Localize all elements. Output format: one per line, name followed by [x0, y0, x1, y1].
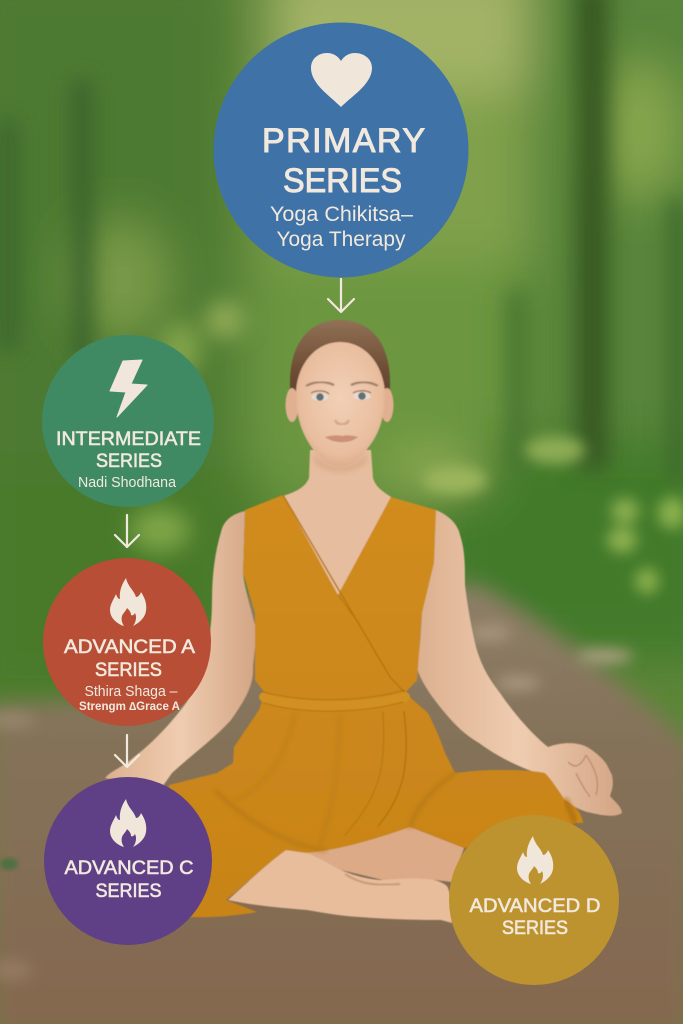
text: intermediate subtitle: Nadi Shodhana	[78, 475, 177, 491]
ears	[286, 388, 394, 422]
icon: flame	[110, 799, 146, 847]
icon: heart	[311, 53, 372, 107]
text: primary series subtitle: Yoga Therapy	[276, 228, 406, 251]
text: primary series subtitle	[270, 203, 413, 251]
arrow: intermediate to advanced A	[115, 515, 139, 547]
icon: flame	[110, 578, 146, 626]
heading: advanced C series: ADVANCED C	[64, 857, 194, 879]
heading: advanced D series: ADVANCED D	[470, 895, 600, 917]
neck and chest	[283, 450, 391, 596]
arrow: advanced A to advanced C	[115, 735, 139, 767]
dress folds, wrap and belt	[215, 495, 575, 850]
heading: advanced C series	[64, 857, 194, 902]
heading: intermediate series: SERIES	[96, 450, 162, 472]
panel: advanced D series	[449, 815, 619, 985]
heading: advanced A series: SERIES	[95, 659, 162, 681]
heading: intermediate series: INTERMEDIATE	[56, 428, 201, 450]
arrow: primary to figure	[328, 279, 354, 312]
face	[296, 342, 385, 466]
figure: seated woman in orange dress	[105, 320, 622, 923]
hand details	[568, 755, 598, 797]
back leg	[300, 827, 464, 882]
panel: advanced A series	[43, 558, 211, 726]
heading: advanced A series	[64, 636, 195, 681]
right arm and hand	[417, 510, 622, 816]
text: advanced A subtitle: Sthira Shaga –	[84, 684, 178, 700]
eyebrows, eyes, nose and lips	[306, 382, 378, 442]
neck shadow	[314, 452, 367, 472]
heading: advanced A series: ADVANCED A	[64, 636, 195, 658]
panel: intermediate series	[42, 335, 214, 507]
heading: primary series: SERIES	[283, 162, 402, 200]
icon: lightning bolt	[110, 360, 147, 417]
heading: primary series	[262, 122, 425, 200]
left arm	[105, 511, 256, 790]
dress	[160, 495, 583, 917]
text: primary series subtitle: Yoga Chikitsa–	[270, 203, 413, 226]
panel: primary series	[214, 22, 468, 278]
heading: advanced D series: SERIES	[502, 917, 568, 939]
front leg and foot	[228, 850, 452, 923]
heading: advanced D series	[470, 895, 600, 939]
heading: intermediate series	[56, 428, 201, 472]
icon: flame	[517, 836, 553, 884]
panel: advanced C series	[44, 777, 212, 945]
hair	[290, 320, 390, 400]
heading: primary series: PRIMARY	[262, 122, 425, 160]
heading: advanced C series: SERIES	[96, 880, 162, 902]
text: advanced A subtitle: Strengm ∆Grace A	[79, 701, 180, 713]
text: advanced A subtitle	[79, 684, 180, 713]
